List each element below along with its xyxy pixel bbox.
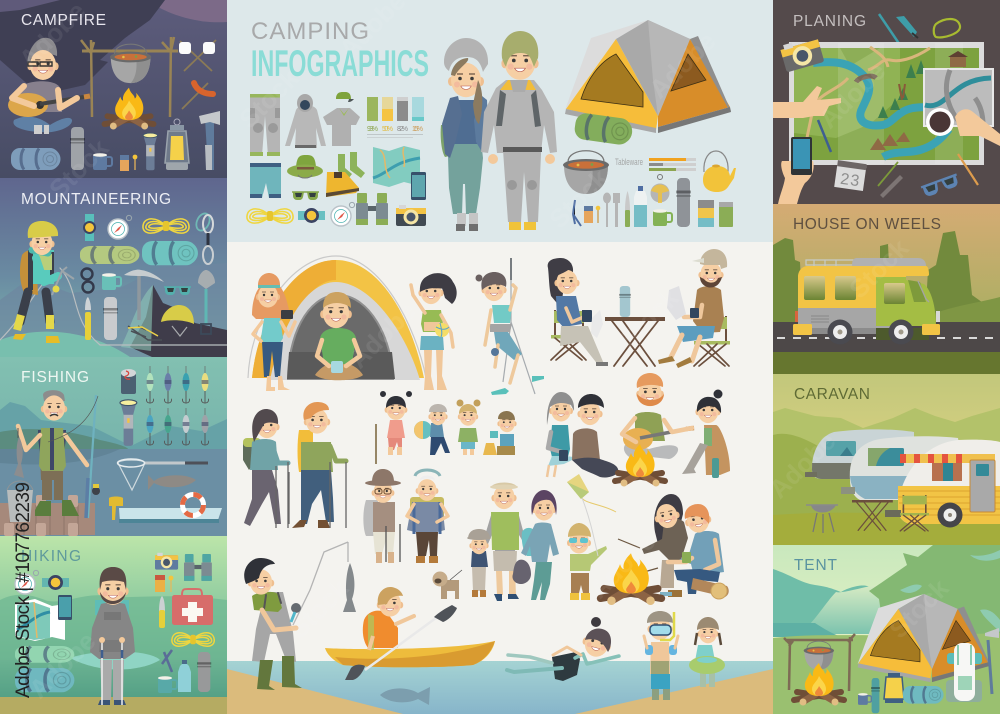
figure: climber on rope [476, 258, 544, 395]
icon: hanging fish [14, 428, 24, 478]
icon: map [15, 599, 65, 641]
icon: fishing rod [48, 395, 100, 518]
panel: house on wheels [773, 204, 1000, 374]
icon: shovel [198, 270, 215, 334]
icon: green bedroll [80, 246, 139, 264]
icon: compass [331, 202, 355, 226]
figure: couple sitting [547, 392, 618, 478]
figure: fisherman in waders [244, 542, 348, 690]
icon: orange pencil [958, 154, 978, 185]
watermark: adobe stock: Adobe [583, 526, 661, 604]
figure: girl with camera [252, 273, 295, 391]
icon: phone in hand [778, 137, 814, 204]
watermark: adobe stock: Adobe [813, 56, 891, 134]
icon: coffee cup [926, 108, 954, 136]
icon: lantern [884, 673, 904, 703]
figure: woman by fire [682, 390, 730, 478]
figure: hiking man [289, 402, 346, 528]
icon: matches [155, 575, 173, 592]
heading: caravan: CARAVAN [794, 386, 870, 403]
figure: woman on camping chair [548, 258, 608, 366]
icon: food cans [698, 200, 733, 227]
watermark: adobe stock: Stock [883, 573, 955, 644]
figure: family mom [521, 490, 559, 600]
chart: percentage bars [367, 97, 424, 138]
icon: mug [93, 153, 112, 170]
icon: roasting campfire [600, 553, 662, 605]
icon: green mug [653, 209, 672, 226]
water and sand [227, 661, 773, 714]
icon: motor boat [109, 494, 222, 523]
figure: hiking woman [243, 409, 288, 528]
watermark: adobe stock: Stock [43, 133, 115, 204]
icon: camper van [793, 258, 940, 344]
icon: bait can [121, 369, 136, 394]
icon: blue pen [818, 120, 831, 152]
icon: pocket tool [162, 650, 172, 672]
icon: barbecue grill [806, 505, 838, 533]
figure: girl with stick [376, 391, 412, 464]
icon: bedroll [11, 148, 60, 170]
icon: rope [143, 219, 189, 233]
figure: blonde girl [456, 400, 480, 455]
watermark: adobe stock: Stock [843, 233, 915, 304]
icon: dome tent [858, 594, 990, 682]
figure: climber [0, 221, 227, 345]
figure: guitar man by fire [615, 373, 694, 486]
figure: fisherman [18, 390, 87, 516]
icon: water bottle [178, 660, 191, 692]
panel: caravan [773, 374, 1000, 545]
heading: house on wheels: HOUSE ON WEELS [793, 216, 941, 233]
icon: compass [108, 215, 132, 239]
icon: middle caravan [841, 436, 968, 500]
icon: cooking pot [563, 151, 609, 194]
heading: planing: PLANING [793, 13, 866, 30]
icon: pug dog [432, 570, 462, 599]
icon: rope [247, 209, 293, 223]
icon: green bedroll [15, 646, 74, 663]
icon: teal bedroll [15, 668, 74, 692]
icon: landing net [118, 459, 208, 490]
icon: rope [172, 633, 214, 646]
watermark: adobe stock: Adobe [23, 626, 101, 704]
watermark: adobe stock: Adobe [763, 426, 841, 504]
icon: flashlight [143, 133, 158, 170]
icon: grey thermos [103, 297, 118, 340]
icon: camera [396, 205, 426, 226]
icon: pointing hand [773, 86, 841, 118]
panel: camping gear header [227, 0, 773, 242]
heading: camping: CAMPING [251, 18, 369, 45]
icon: phone [58, 595, 72, 620]
watermark: adobe stock: Stock [233, 63, 305, 134]
chart: percentage bars: 15% [412, 126, 423, 133]
figure: family boy [567, 523, 607, 600]
figure: tent with boy [248, 256, 426, 380]
icon: crampons [128, 326, 162, 340]
panel: people scene [227, 242, 773, 714]
icon: back caravan [805, 429, 914, 479]
icon: bucket [7, 481, 33, 522]
icon: sausage [182, 83, 213, 109]
icon: axe [199, 111, 220, 170]
panel: planning [773, 0, 1000, 204]
panel: mountaineering [0, 178, 227, 357]
figure: guitar player [8, 38, 90, 134]
figure: boy with beach ball [414, 404, 450, 455]
icon: trousers [250, 94, 280, 156]
icon: camera [779, 35, 824, 72]
icon: backpack [946, 643, 982, 702]
icon: sun hat [287, 155, 323, 178]
panel: tent [773, 545, 1000, 714]
icon: binoculars [356, 193, 388, 225]
icon: teal bedroll [142, 241, 198, 265]
icon: sunglasses [164, 287, 191, 295]
icon: thermos [871, 678, 880, 713]
icon: folding table [852, 500, 893, 530]
map with river [789, 42, 984, 165]
icon: knife [159, 596, 165, 628]
icon: dock [0, 495, 95, 536]
icon: folding table and flask [605, 286, 665, 366]
figure: family dad [483, 482, 531, 601]
icon: ice axe [124, 270, 164, 320]
icon: cooking frame with pot and fire [81, 37, 178, 129]
icon: front yellow caravan [885, 440, 1000, 528]
heading: hiking: HIKING [21, 548, 81, 565]
icon: hoodie [285, 94, 326, 148]
label: tableware: Tableware [615, 157, 643, 168]
icon: pencil and marker [878, 162, 903, 198]
icon: calendar: 23 [839, 171, 860, 190]
vertical stock id label: Adobe Stock | #107762239 [13, 482, 34, 698]
icon: right hand on cup [955, 109, 1000, 146]
panel: hiking [0, 536, 227, 714]
icon: knife [85, 297, 91, 340]
icon: carabiners [194, 211, 213, 264]
figure: girl with volleyball [411, 273, 457, 390]
watermark: adobe stock: Stock [613, 283, 685, 354]
icon: pens [879, 14, 918, 45]
icon: folding chair [900, 495, 929, 531]
chart: tableware bars [649, 158, 696, 171]
icons: fishing lures [146, 366, 209, 445]
icon: kite [567, 474, 616, 556]
icon: mug [858, 693, 871, 705]
icon: binoculars [184, 554, 212, 581]
icon: carabiner [934, 19, 960, 37]
figure: kayaker and kayak [325, 587, 495, 680]
icon: flashlight [120, 400, 137, 446]
icon: dome tent [565, 20, 731, 133]
icon: shorts [250, 163, 281, 198]
icon: underwater fish [380, 687, 430, 705]
panel: campfire [0, 0, 227, 178]
watermark: adobe stock: Stock [543, 163, 615, 234]
icon: first aid kit [172, 589, 213, 625]
heading: campfire: CAMPFIRE [21, 12, 106, 29]
icon: cooking frame with fire [784, 634, 855, 706]
figure: elderly woman hiker [363, 469, 401, 563]
heading: infographics: INFOGRAPHICS [251, 43, 429, 84]
watermark: adobe stock: Stock [283, 573, 355, 644]
icon: belay device [82, 268, 94, 292]
heading: mountaineering: MOUNTAINEERING [21, 191, 171, 208]
figure: boy playing in sand [483, 411, 517, 455]
figure: man reading on chair [658, 249, 730, 368]
icon: thermos [70, 127, 85, 170]
icon: hooked fish [343, 563, 356, 612]
heading: tent: TENT [794, 557, 838, 574]
watermark: adobe stock: Adobe [643, 26, 721, 104]
icon: socks and boots [326, 152, 365, 197]
icon: camera [155, 553, 178, 570]
icon: phone [411, 172, 426, 200]
figure: girl with backpack [441, 38, 488, 231]
figure: elderly man hiker [407, 470, 448, 563]
watermark: adobe stock: Adobe [343, 296, 421, 374]
icon: shirt and cap [323, 92, 360, 146]
icon: marshmallows [179, 40, 216, 71]
icon: compass [15, 570, 39, 594]
icon: thermos [676, 178, 691, 227]
panel: fishing [0, 357, 227, 536]
icon: bedroll [903, 686, 944, 704]
overlay folded map [923, 68, 994, 127]
figure: hiker [90, 567, 135, 705]
icon: teal mug [102, 273, 121, 290]
chart: percentage bars: 50% [382, 126, 393, 133]
icon: helmet [161, 305, 194, 336]
figure: boy with backpack [481, 31, 557, 230]
icon: eyeglasses [921, 174, 960, 198]
icon: watch [83, 214, 96, 241]
icon: caught fish [148, 475, 196, 490]
icon: mug [158, 676, 177, 693]
icon: lantern [165, 119, 189, 170]
icon: matches [120, 155, 137, 171]
heading: fishing: FISHING [21, 369, 89, 386]
icon: green sleeping bag [573, 112, 634, 146]
icon: folded map [373, 146, 420, 187]
figure: snorkel boy [644, 611, 678, 700]
icon: calendar [834, 160, 867, 191]
icon: kettle [703, 151, 736, 192]
icon: tableware row [573, 174, 670, 227]
icon: grey thermos [197, 652, 211, 692]
icon: sunglasses [292, 192, 319, 200]
chart: percentage bars: 93% [367, 126, 378, 133]
icon: watch [42, 575, 69, 590]
icon: wrist watch [298, 208, 325, 223]
figure: swimmer [507, 617, 619, 681]
figure: marshmallow couple [618, 494, 729, 599]
icon: axe [985, 628, 999, 694]
figure: family child [467, 529, 491, 597]
figure: girl with swim ring [689, 617, 725, 687]
chart: percentage bars: 82% [397, 126, 408, 133]
